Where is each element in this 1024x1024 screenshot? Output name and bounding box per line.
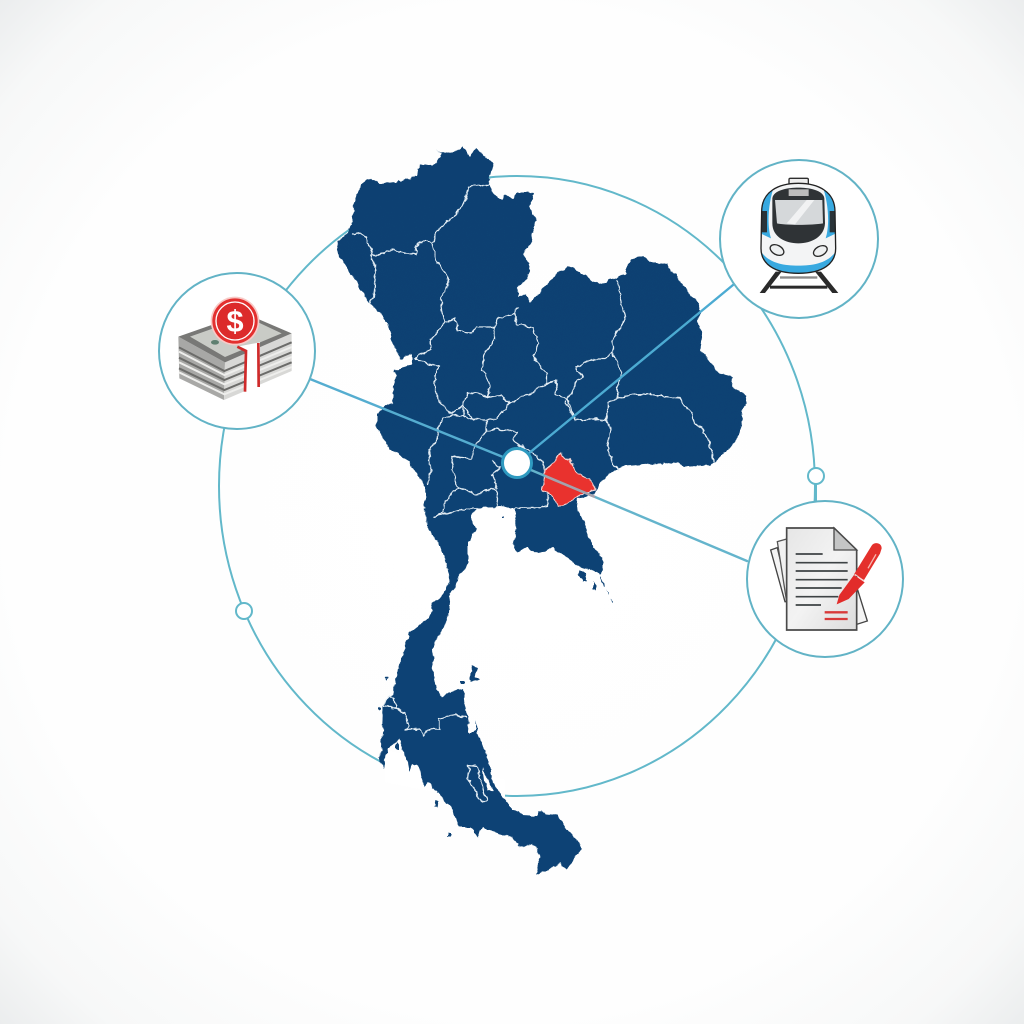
inner lagoon bbox=[482, 767, 493, 791]
line: hub to contract node bbox=[531, 470, 747, 561]
icon: dollar coin: $ bbox=[226, 305, 244, 339]
islands bbox=[378, 516, 613, 837]
ring marker: south-west bbox=[236, 603, 252, 619]
connector lines bbox=[310, 285, 747, 561]
panel: money node bbox=[159, 273, 315, 429]
map of Thailand bbox=[337, 146, 747, 875]
line: train node to hub bbox=[528, 285, 733, 454]
highlighted province bbox=[542, 453, 595, 506]
panel: contract node bbox=[747, 501, 903, 657]
panel: train node bbox=[720, 160, 878, 318]
line: money node to hub bbox=[310, 379, 503, 457]
icon: train bbox=[758, 178, 838, 293]
central hub bbox=[502, 448, 532, 478]
icon: contract and pen bbox=[771, 528, 882, 630]
icon: stack of banknotes bbox=[178, 297, 292, 400]
ring marker: east bbox=[808, 468, 824, 484]
map landmass bbox=[337, 146, 747, 875]
ring marker stem bbox=[815, 484, 817, 501]
connection ring bbox=[219, 176, 815, 796]
line segment across province bbox=[545, 476, 595, 497]
provincial borders bbox=[352, 183, 714, 802]
train body bbox=[762, 184, 835, 273]
tracks bbox=[760, 272, 838, 293]
